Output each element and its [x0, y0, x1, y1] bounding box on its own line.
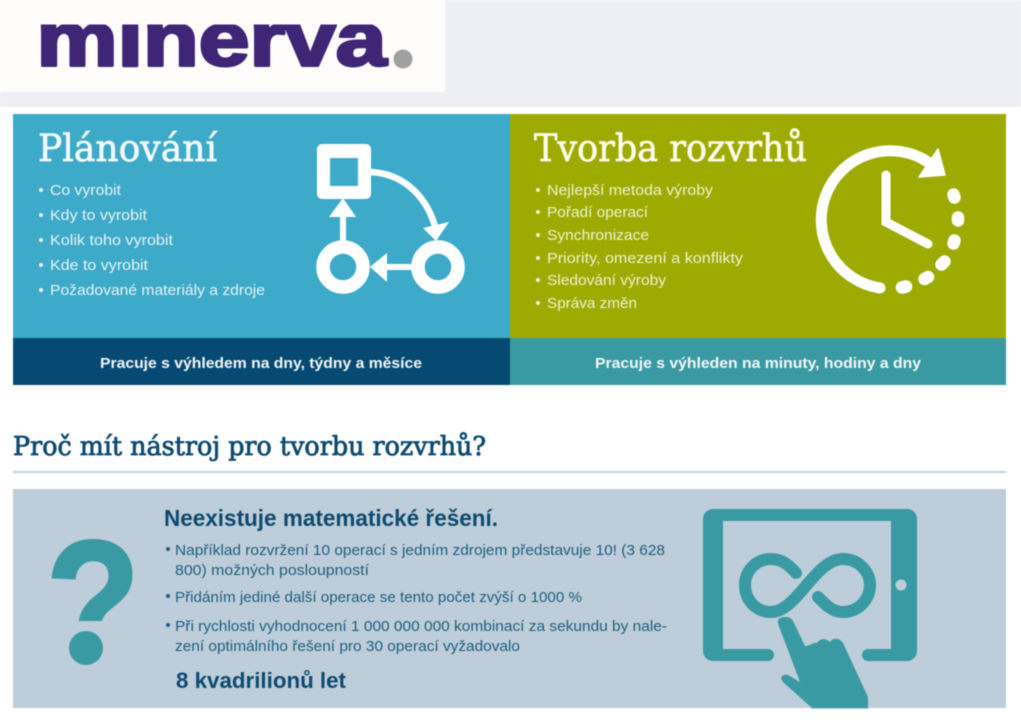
band: scheduling horizon [510, 338, 1006, 385]
icon: question mark: ? [46, 504, 140, 699]
list: scheduling items [536, 182, 744, 312]
panel: why a scheduling tool [13, 489, 1006, 708]
list: reasons: 800) možných posloupností [175, 562, 370, 579]
callout: 8 quadrillion years: 8 kvadrilionů let [176, 668, 347, 693]
list: planning items: Kdy to vyrobit [50, 207, 148, 224]
list: planning items: Kolik toho vyrobit [50, 232, 174, 249]
list: scheduling items: Sledování výroby [547, 272, 667, 289]
list: reasons: Například rozvržení 10 operací s jedním zdrojem představuje 10! (3 628 [175, 542, 665, 559]
list: planning items: Co vyrobit [50, 182, 122, 199]
panel: Plánování [13, 114, 510, 338]
logo: minerva: minerva [36, 0, 387, 82]
list: reasons: Při rychlosti vyhodnocení 1 000 000 000 kombinací za sekundu by nale- [175, 618, 667, 635]
list: scheduling items: Správa změn [547, 295, 637, 312]
icon: tablet with infinity and hand [703, 509, 917, 708]
list: scheduling items: Priority, omezení a konflikty [547, 250, 744, 267]
logo: minerva [0, 0, 445, 92]
icon: question mark [51, 538, 134, 666]
heading: Tvorba rozvrhů: Tvorba rozvrhů [534, 127, 807, 170]
list: reasons [166, 542, 667, 655]
icon: clock [821, 149, 958, 288]
list: scheduling items: Pořadí operací [547, 204, 649, 221]
list: reasons: zení optimálního řešení pro 30 operací vyžadovalo [175, 638, 520, 655]
list: planning items: Požadované materiály a zdroje [50, 282, 265, 299]
list: scheduling items: Synchronizace [547, 227, 649, 244]
list: reasons: Přidáním jediné další operace se tento počet zvýší o 1000 % [175, 589, 582, 606]
heading: no mathematical solution: Neexistuje matematické řešení. [164, 505, 498, 531]
panel: Tvorba rozvrhů [510, 114, 1006, 338]
list: planning items: Kde to vyrobit [50, 257, 149, 274]
band: planning horizon [13, 338, 510, 385]
list: scheduling items: Nejlepší metoda výroby [547, 182, 714, 199]
band: scheduling horizon: Pracuje s výhleden na minuty, hodiny a dny [595, 355, 922, 372]
band: planning horizon: Pracuje s výhledem na dny, týdny a měsíce [100, 355, 422, 372]
list: planning items [39, 182, 265, 299]
heading: Plánování: Plánování [38, 127, 218, 170]
icon: process flow [317, 144, 458, 287]
heading: section title: Proč mít nástroj pro tvorbu rozvrhů? [13, 432, 486, 462]
